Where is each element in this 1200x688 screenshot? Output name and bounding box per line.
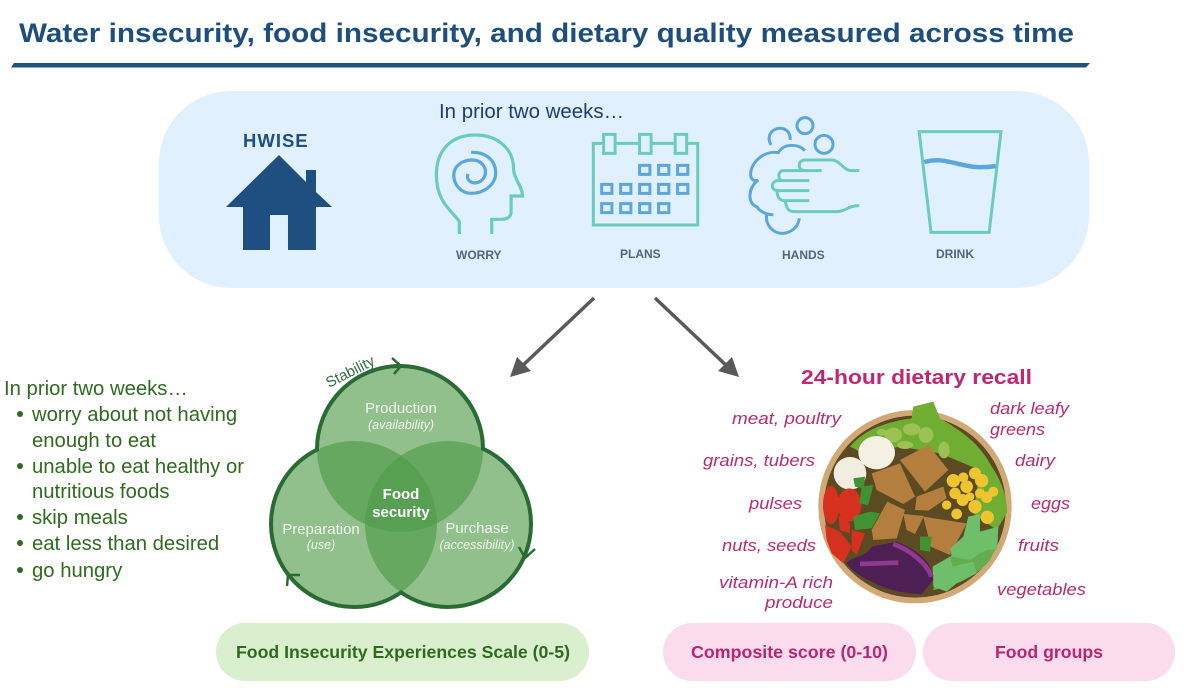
food group labels: nuts, seeds bbox=[722, 536, 817, 555]
text block: food insecurity questions: nutritious foods bbox=[32, 481, 170, 503]
label pill: composite score: Composite score (0-10) bbox=[691, 642, 888, 662]
food group labels bbox=[703, 399, 1087, 612]
venn labels: Purchase bbox=[445, 520, 509, 537]
arrow: to food insecurity bbox=[510, 298, 594, 377]
cucumber bbox=[933, 514, 998, 592]
icon: drinking glass bbox=[919, 132, 1001, 232]
heading: dietary recall: 24-hour dietary recall bbox=[801, 366, 1032, 389]
text block: food insecurity questions: In prior two weeks… bbox=[4, 378, 188, 400]
food group labels: grains, tubers bbox=[703, 451, 816, 470]
text block: food insecurity questions: go hungry bbox=[32, 560, 123, 582]
panel heading: In prior two weeks… bbox=[439, 100, 624, 123]
arrow: to dietary recall bbox=[655, 298, 739, 377]
food group labels: vitamin-A rich bbox=[719, 573, 833, 592]
icon labels: PLANS bbox=[620, 247, 661, 261]
label pill: composite score bbox=[663, 623, 916, 681]
chart: food security venn diagram bbox=[271, 352, 535, 607]
food group labels: eggs bbox=[1031, 494, 1071, 513]
icon: plans calendar bbox=[593, 134, 698, 225]
stability label: Stability bbox=[323, 352, 378, 392]
icon labels bbox=[456, 247, 974, 262]
food group labels: pulses bbox=[748, 494, 803, 513]
food group labels: vegetables bbox=[997, 580, 1087, 599]
tomatoes bbox=[823, 486, 865, 563]
text block: food insecurity questions: unable to eat healthy or bbox=[32, 456, 244, 478]
venn labels bbox=[282, 400, 515, 552]
food group labels: dairy bbox=[1015, 451, 1057, 470]
lettuce bbox=[850, 402, 1007, 530]
text block: food insecurity questions: eat less than desired bbox=[32, 533, 219, 555]
HWISE label: HWISE bbox=[243, 130, 309, 151]
panel: HWISE water insecurity bbox=[159, 91, 1089, 288]
icon: house bbox=[226, 155, 332, 250]
venn labels: (use) bbox=[307, 538, 335, 552]
venn outline bbox=[271, 366, 531, 607]
stability arrowheads bbox=[287, 358, 535, 586]
label pill: food insecurity scale bbox=[216, 623, 589, 681]
title underline bbox=[11, 63, 1090, 68]
venn labels: (availability) bbox=[368, 418, 434, 432]
venn labels: security bbox=[372, 504, 430, 521]
bowl rim and interior bbox=[818, 410, 1012, 603]
food group labels: fruits bbox=[1018, 536, 1060, 555]
text block: food insecurity questions bbox=[4, 378, 244, 582]
icon labels: DRINK bbox=[936, 247, 974, 261]
corn bbox=[942, 467, 998, 524]
red cabbage bbox=[847, 542, 933, 594]
text block: food insecurity questions: worry about not having bbox=[31, 404, 237, 426]
label pill: food groups bbox=[923, 623, 1175, 681]
icon labels: HANDS bbox=[782, 248, 825, 262]
venn labels: Food bbox=[383, 486, 419, 503]
title: Water insecurity, food insecurity, and dietary quality measured across time bbox=[19, 18, 1074, 48]
food group labels: greens bbox=[990, 420, 1046, 439]
venn labels: (accessibility) bbox=[439, 538, 515, 552]
icon: salad bowl bbox=[818, 402, 1012, 603]
label pill: food insecurity scale: Food Insecurity Experiences Scale (0-5) bbox=[236, 642, 570, 662]
icon labels: WORRY bbox=[456, 248, 502, 262]
eggs bbox=[858, 436, 895, 469]
edamame bbox=[877, 423, 950, 458]
text block: food insecurity questions: skip meals bbox=[32, 507, 128, 529]
icon: worry head bbox=[436, 135, 523, 234]
food group labels: meat, poultry bbox=[732, 409, 843, 428]
label pill: food groups: Food groups bbox=[995, 642, 1103, 662]
text block: food insecurity questions: enough to eat bbox=[32, 430, 156, 452]
icon: washing hands bbox=[750, 118, 859, 233]
venn labels: Production bbox=[365, 400, 437, 417]
food group labels: produce bbox=[764, 593, 833, 612]
tofu bbox=[872, 445, 967, 555]
food group labels: dark leafy bbox=[990, 399, 1071, 418]
green onion and herbs bbox=[853, 477, 932, 552]
venn labels: Preparation bbox=[282, 521, 360, 538]
